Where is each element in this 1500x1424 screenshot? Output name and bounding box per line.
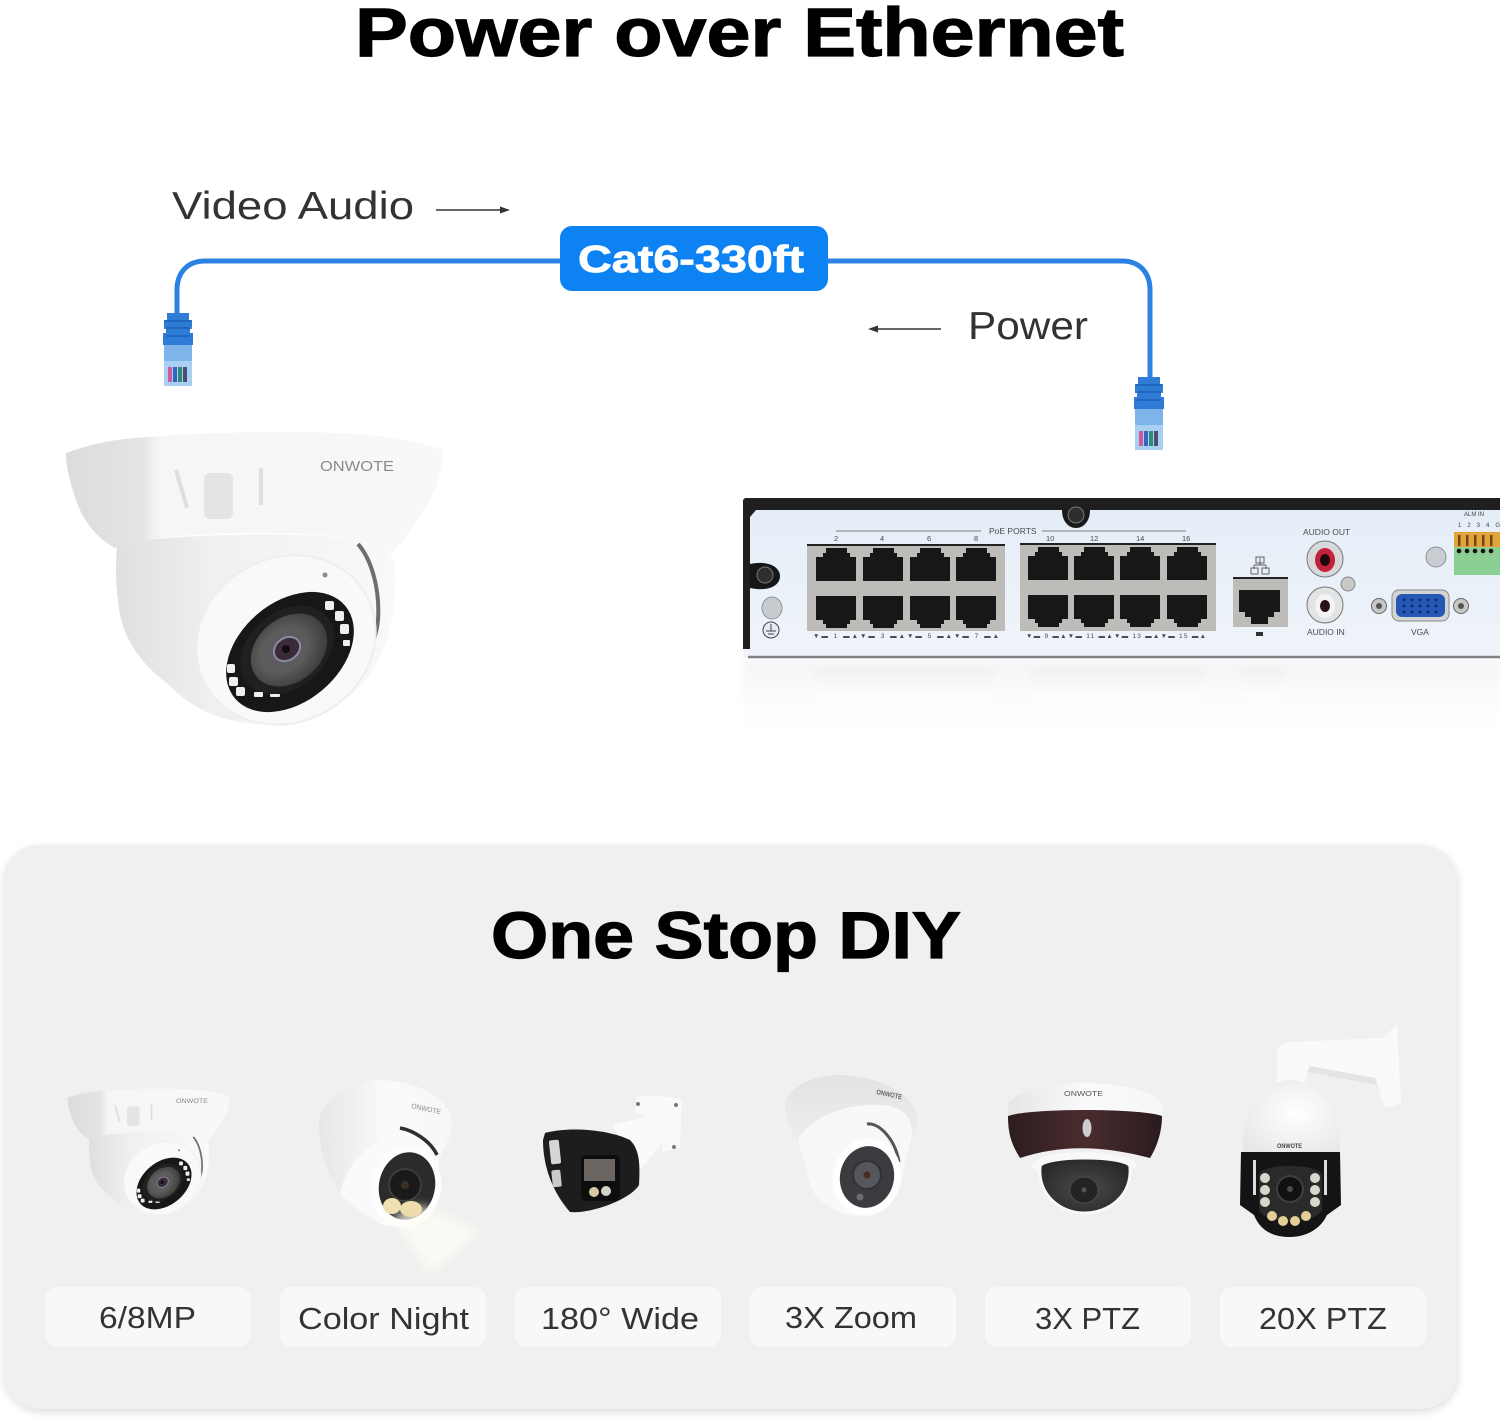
ground screw and symbol: [762, 597, 782, 638]
PoE port labels: 2: [834, 534, 838, 543]
PoE port labels: 6: [927, 534, 931, 543]
chip: 6/8MP: 6/8MP: [99, 1300, 196, 1335]
PoE port labels: ▼▬ 1 ▬▲▼▬ 3 ▬▲▼▬ 5 ▬▲▼▬ 7 ▬▲: [813, 633, 999, 640]
icon: left RJ45 connector: [163, 313, 193, 386]
port block: PoE 1-8: [807, 545, 1005, 631]
icon: right RJ45 connector: [1134, 377, 1164, 450]
thumbnail: 3X zoom turret camera: [785, 1075, 918, 1222]
thumbnail: 20X PTZ speed dome camera: ONWOTE: [1277, 1144, 1302, 1150]
PoE port labels: 16: [1182, 534, 1190, 543]
thumbnail: 6/8MP dome camera: [67, 1089, 230, 1229]
PoE port labels: PoE PORTS: [989, 526, 1037, 536]
screw: left: [750, 563, 780, 589]
heading: One Stop DIY: One Stop DIY: [491, 898, 961, 972]
chip: 20X PTZ: [1220, 1287, 1426, 1347]
port block: PoE 9-16: [1020, 544, 1216, 631]
thumbnail: 3X PTZ dome camera: ONWOTE: [1064, 1091, 1103, 1098]
chip: Color Night: [280, 1287, 486, 1347]
thumbnail: color night turret camera: ONWOTE: [411, 1103, 442, 1116]
alarm terminal block: ALM IN: [1464, 512, 1484, 518]
audio connectors: [1303, 527, 1355, 637]
PoE port labels: [813, 526, 1206, 640]
PoE port labels: 10: [1046, 534, 1054, 543]
chip: 180° Wide: [515, 1287, 721, 1347]
VGA connector: VGA: [1411, 627, 1429, 637]
chip: 3X PTZ: [985, 1287, 1191, 1347]
thumbnail: 3X zoom turret camera: ONWOTE: [876, 1089, 903, 1101]
dome camera: ONWOTE: [320, 458, 394, 475]
label: video audio with arrow: [172, 185, 510, 228]
chip: 6/8MP: [45, 1287, 251, 1347]
audio connectors: AUDIO IN: [1307, 627, 1345, 637]
badge: Cat6-330ft: Cat6-330ft: [578, 239, 804, 281]
VGA connector: [1372, 590, 1468, 637]
LAN port: [1233, 557, 1288, 636]
audio connectors: AUDIO OUT: [1303, 527, 1350, 537]
thumbnail: 20X PTZ speed dome camera: [1240, 1025, 1401, 1237]
chip: 3X Zoom: [750, 1287, 956, 1347]
PoE port labels: 4: [880, 534, 884, 543]
thumbnail: 3X PTZ dome camera: [1008, 1083, 1162, 1213]
thumbnail: color night turret camera: [319, 1080, 480, 1272]
screw: top: [1062, 507, 1090, 528]
label: power with arrow: [868, 305, 1088, 348]
network cable: [177, 261, 1150, 380]
badge: Cat6-330ft: [560, 226, 828, 291]
label: video audio with arrow: Video Audio: [172, 185, 414, 228]
thumbnail: 6/8MP dome camera: ONWOTE: [176, 1098, 209, 1105]
label: power with arrow: Power: [968, 305, 1088, 348]
PoE port labels: 12: [1090, 534, 1098, 543]
dome camera: [66, 432, 443, 757]
chip: 20X PTZ: 20X PTZ: [1259, 1301, 1387, 1336]
panel: One Stop DIY background: [3, 845, 1457, 1411]
alarm terminal block: 1 2 3 4 G: [1458, 523, 1500, 529]
PoE port labels: 14: [1136, 534, 1144, 543]
NVR rear panel: [743, 498, 1500, 658]
NVR reflection: [743, 660, 1500, 752]
chip: 3X Zoom: 3X Zoom: [785, 1300, 917, 1335]
chip: 180° Wide: 180° Wide: [541, 1301, 699, 1336]
PoE port labels: ▼▬ 9 ▬▲▼▬ 11 ▬▲▼▬ 13 ▬▲▼▬ 15 ▬▲: [1026, 633, 1206, 640]
thumbnail: 180 wide bullet camera: [543, 1096, 682, 1212]
alarm terminal block: [1426, 512, 1500, 575]
chip: Color Night: Color Night: [298, 1301, 469, 1336]
chip: 3X PTZ: 3X PTZ: [1035, 1301, 1140, 1336]
PoE port labels: 8: [974, 534, 978, 543]
